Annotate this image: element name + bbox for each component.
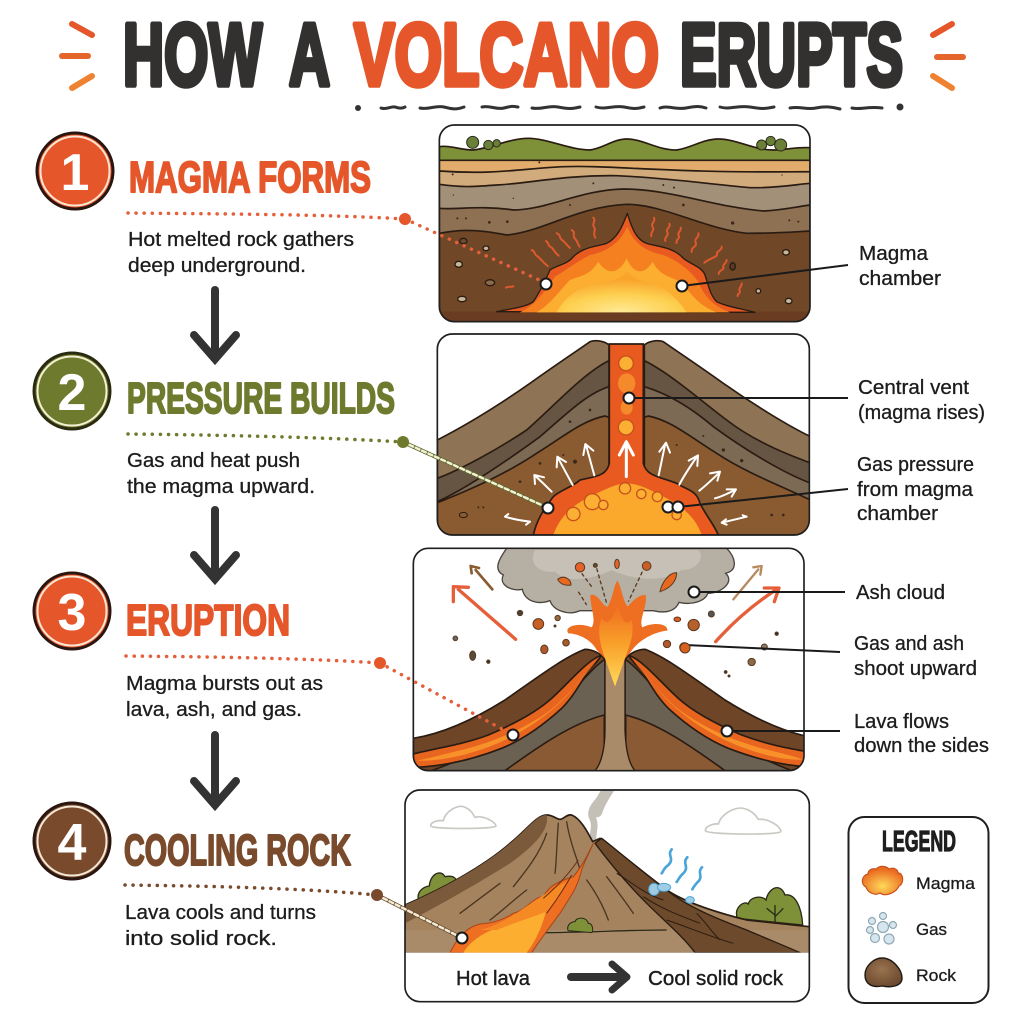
labels: lava flows [854, 711, 989, 757]
left slope [413, 649, 605, 771]
steam waves [662, 849, 702, 889]
lava bombs and rocks [453, 559, 778, 677]
steam puffs [649, 883, 694, 903]
panel 3 frame [413, 548, 804, 771]
right lava glow [635, 664, 803, 760]
ground layers [439, 138, 810, 322]
caption: cool solid rock: Cool solid rock [648, 968, 784, 990]
left lava glow [417, 664, 595, 761]
arrow: step 3 to 4 [194, 735, 236, 805]
labels: gas pressure: Gas pressure [857, 454, 974, 476]
legend [848, 817, 988, 1003]
panel: magma chamber cross-section [439, 125, 810, 322]
description 2 [127, 450, 315, 498]
number badge 1: 1 [61, 144, 89, 202]
number badge 4: 4 [58, 814, 87, 872]
clouds [431, 806, 781, 834]
connector end dots [371, 213, 411, 901]
soil specks [452, 161, 799, 225]
pressure arrows [505, 442, 747, 525]
description 4: into solid rock. [125, 928, 277, 950]
ground strip [405, 930, 809, 953]
labels: gas pressure: chamber [857, 503, 938, 525]
right tree bush [736, 888, 803, 925]
heading 4: COOLING ROCK [124, 826, 351, 875]
number badge 1 [37, 133, 113, 209]
connector 3 [126, 656, 513, 735]
description 3 [126, 673, 323, 721]
description 3: Magma bursts out as [126, 673, 323, 695]
heading 2: PRESSURE BUILDS [127, 374, 395, 423]
volcano body [405, 815, 809, 953]
arrow: hot to cool [571, 964, 627, 990]
number badge 2: 2 [58, 364, 86, 422]
labels: magma chamber [859, 243, 941, 290]
labels: gas and ash [854, 633, 977, 680]
step 2: pressure builds [34, 353, 395, 498]
heading 1: MAGMA FORMS [129, 153, 371, 202]
lava cracks [543, 860, 578, 913]
panel 4 frame [405, 790, 809, 1002]
arrow: step 2 to 3 [194, 510, 236, 579]
step 1: magma forms [37, 133, 371, 277]
labels: magma chamber: Magma [859, 243, 929, 265]
labels: lava flows: down the sides [854, 735, 989, 757]
panel 1 frame [439, 125, 810, 322]
number badge 3 [34, 573, 110, 649]
vent [595, 657, 635, 771]
labels: gas pressure [857, 454, 974, 525]
magma body [497, 213, 755, 312]
description 2: Gas and heat push [127, 450, 300, 472]
number badge 2 [34, 353, 110, 429]
right flank layers [644, 341, 816, 535]
description 4: Lava cools and turns [125, 902, 316, 924]
legend item: gas [866, 912, 947, 944]
small shrub [568, 918, 593, 933]
description 1: Hot melted rock gathers [128, 229, 354, 251]
number badge 3: 3 [58, 584, 86, 642]
connector 2 [128, 434, 546, 507]
magma bubbles [567, 356, 681, 521]
title word: how a: A [289, 5, 330, 104]
title underline [355, 104, 904, 111]
left bush [418, 873, 456, 899]
label: ash cloud: Ash cloud [856, 582, 945, 604]
left flank layers [437, 341, 609, 535]
blast arrows [453, 566, 779, 642]
legend title: LEGEND [882, 826, 956, 858]
connector 4 [125, 885, 462, 938]
title word: volcano: VOLCANO [354, 5, 659, 104]
description 3: lava, ash, and gas. [126, 699, 302, 721]
description 4 [125, 902, 316, 950]
title accent strokes [62, 24, 963, 88]
labels: lava flows: Lava flows [854, 711, 949, 733]
caption: hot lava: Hot lava [456, 968, 531, 990]
description 1: deep underground. [128, 255, 306, 277]
legend item: magma [862, 866, 976, 895]
slope ridges [460, 822, 633, 920]
trees [467, 136, 787, 151]
step 4: cooling rock [34, 803, 351, 950]
panel: pressure builds volcano [437, 334, 816, 535]
legend item: gas: Gas [916, 920, 947, 939]
labels: magma chamber: chamber [859, 268, 941, 290]
rising magma [533, 344, 718, 535]
step 3: eruption [34, 573, 323, 721]
shaded left ridge [405, 815, 547, 923]
lava fountain [567, 581, 667, 687]
leader lines to labels [629, 265, 848, 731]
title [123, 5, 903, 104]
heading 3: ERUPTION [126, 596, 290, 645]
connector 1 [128, 213, 546, 283]
labels: gas and ash: Gas and ash [854, 633, 964, 655]
right slope [625, 649, 817, 771]
lava bomb marker [680, 643, 690, 653]
connector lines from steps to panels [125, 213, 546, 938]
arrow: step 1 to 2 [194, 290, 236, 359]
description 1 [128, 229, 354, 277]
heat squiggles [506, 218, 742, 296]
cooled rock flow [595, 838, 800, 953]
legend frame [848, 817, 988, 1003]
labels: gas pressure: from magma [857, 479, 974, 501]
caption band [405, 953, 809, 1003]
hot lava flow [450, 843, 593, 953]
steam [591, 789, 608, 842]
legend item: rock: Rock [916, 966, 957, 985]
bomb trails [578, 568, 642, 605]
caption: hot lava to cool solid rock [456, 964, 784, 990]
soil specks [459, 409, 785, 518]
legend item: rock [865, 958, 957, 987]
labels: central vent: (magma rises) [858, 402, 985, 424]
title word: how a: HOW [123, 5, 262, 104]
labels: central vent [858, 377, 985, 424]
rocks in soil [455, 238, 792, 304]
legend item: magma: Magma [916, 874, 976, 893]
callout markers [456, 278, 732, 944]
panel: eruption [413, 548, 817, 771]
number badge 4 [34, 803, 110, 879]
description 2: the magma upward. [127, 476, 315, 498]
labels: central vent: Central vent [858, 377, 969, 399]
panel: cooling rock [405, 789, 809, 1003]
labels: gas and ash: shoot upward [854, 658, 977, 680]
panel 2 frame [437, 334, 809, 535]
ash cloud shape [498, 548, 734, 613]
rock cracks [617, 873, 733, 943]
